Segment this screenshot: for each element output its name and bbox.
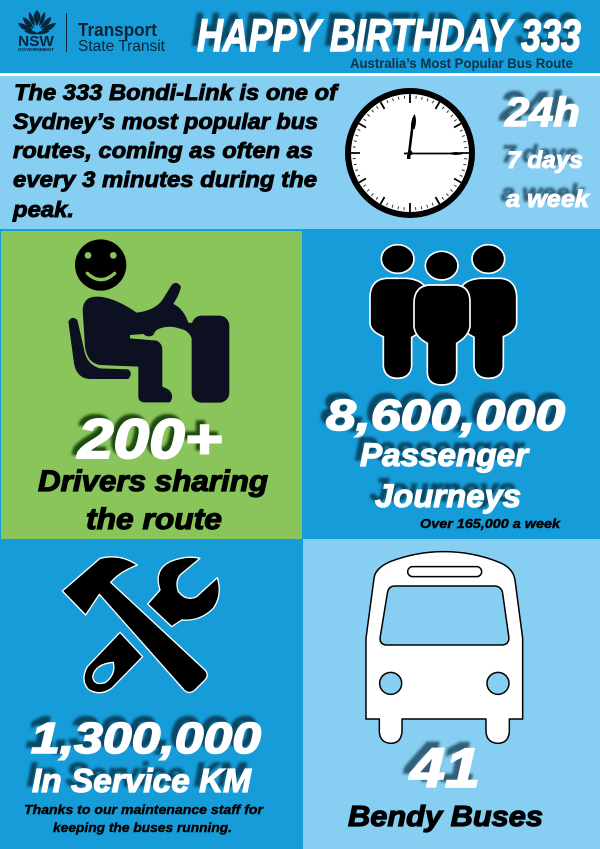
note: weekly journeys: Over 165,000 a week bbox=[420, 517, 561, 531]
stat: a week: a week bbox=[506, 186, 591, 213]
logo: State Transit: State Transit bbox=[78, 38, 166, 55]
panel: header bbox=[0, 0, 600, 76]
label: drivers sharing the route: Drivers sharing bbox=[38, 465, 268, 498]
intro text: every 3 minutes during the bbox=[13, 167, 317, 192]
icon: bus bbox=[366, 552, 523, 743]
note: thanks to maintenance staff: keeping the buses running. bbox=[53, 820, 232, 835]
panel: passengers bbox=[302, 230, 600, 539]
panel: drivers bbox=[1, 231, 302, 539]
subtitle: Australia’s Most Popular Bus Route bbox=[350, 56, 573, 71]
logo: NSW Government: NSW bbox=[18, 33, 55, 50]
stat: 24h: 24h bbox=[504, 89, 580, 135]
icon: people bbox=[370, 245, 517, 385]
note: thanks to maintenance staff: Thanks to our maintenance staff for bbox=[24, 802, 264, 817]
panel: maintenance bbox=[0, 539, 303, 849]
intro text: routes, coming as often as bbox=[13, 138, 313, 163]
note: thanks to maintenance staff bbox=[24, 802, 264, 835]
label: Passenger: Passenger bbox=[360, 437, 530, 473]
stat: 41: 41 bbox=[409, 736, 480, 799]
panel: buses bbox=[303, 539, 600, 849]
icon: hammer and wrench bbox=[62, 557, 219, 693]
icon: driver bbox=[68, 239, 229, 403]
intro text: Sydney’s most popular bus bbox=[13, 109, 318, 134]
stat: 1,300,000: 1,300,000 bbox=[31, 714, 262, 763]
stat: 200+: 200+ bbox=[77, 407, 222, 470]
intro text: The 333 Bondi-Link is one of bbox=[14, 80, 340, 105]
logo: NSW Government: GOVERNMENT bbox=[18, 47, 55, 52]
intro text: peak. bbox=[12, 197, 74, 222]
logo divider bbox=[66, 13, 67, 52]
stat: 7 days: 7 days bbox=[507, 147, 583, 174]
stat: 8,600,000: 8,600,000 bbox=[326, 391, 566, 440]
label: Bendy Buses: Bendy Buses bbox=[348, 801, 543, 833]
icon: clock bbox=[348, 91, 472, 215]
logo: Transport: Transport bbox=[78, 20, 157, 40]
label: drivers sharing the route: the route bbox=[86, 503, 222, 536]
label: Journeys: Journeys bbox=[375, 478, 521, 514]
label: drivers sharing the route bbox=[38, 465, 268, 536]
intro text bbox=[12, 80, 340, 222]
label: In Service KM: In Service KM bbox=[32, 762, 253, 799]
logo: NSW Government bbox=[18, 10, 56, 52]
panel: intro bbox=[0, 76, 600, 229]
